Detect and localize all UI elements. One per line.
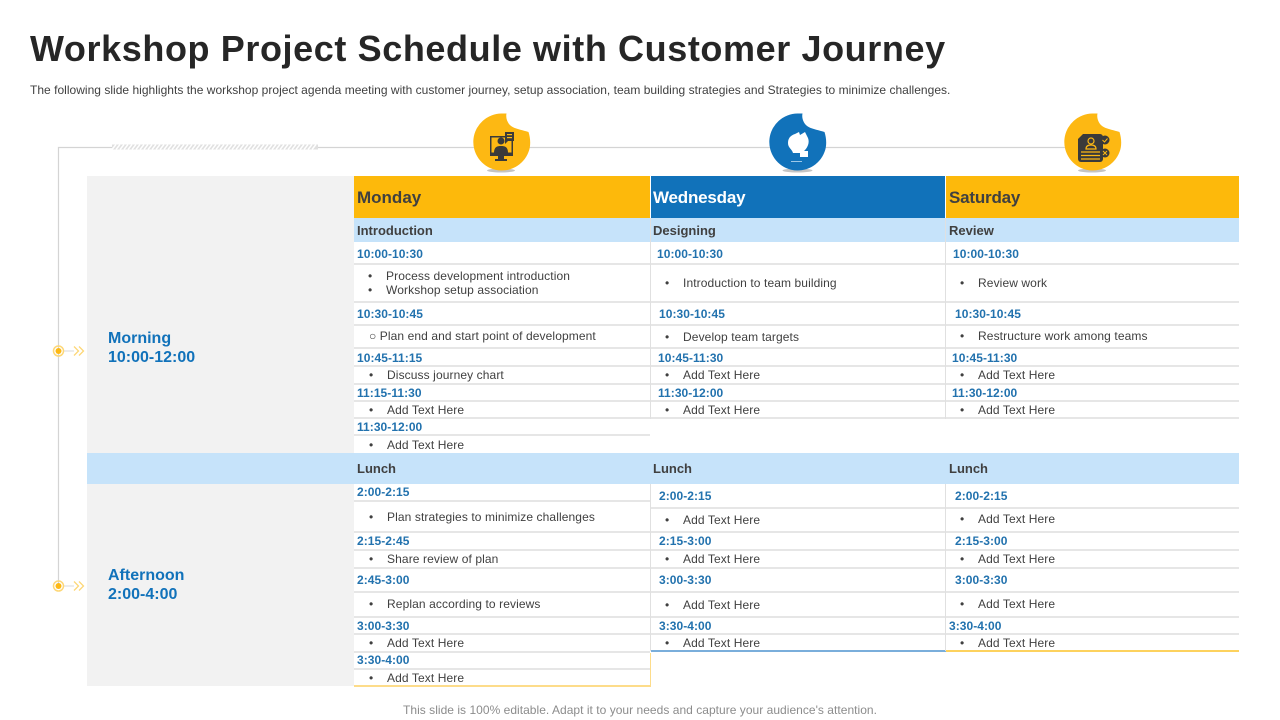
column: Saturday: 10:30-10:45 — [955, 307, 1021, 321]
column: Saturday: • Add Text Here — [960, 512, 1055, 526]
column: Wednesday: 2:15-3:00 — [659, 534, 711, 548]
icon: Saturday review document sticker — [1064, 114, 1122, 172]
column: Monday: • Add Text Here — [369, 438, 464, 452]
column: Monday: 11:30-12:00 — [357, 420, 422, 434]
column: Saturday: • Add Text Here — [960, 368, 1055, 382]
column: Saturday: • Add Text Here — [960, 636, 1055, 650]
column: Wednesday: • Add Text Here — [665, 403, 760, 417]
column: Monday: 2:15-2:45 — [357, 534, 409, 548]
column: Wednesday: • Introduction to team building — [665, 276, 837, 290]
column: Monday: 2:45-3:00 — [357, 573, 409, 587]
column: Saturday: 2:15-3:00 — [955, 534, 1007, 548]
icon: Monday online meeting sticker — [473, 114, 530, 172]
column: Monday: Introduction — [357, 223, 433, 238]
column: Monday: 11:15-11:30 — [357, 386, 422, 400]
column: Monday: • Plan strategies to minimize challenges — [369, 510, 595, 524]
column: Saturday: 3:00-3:30 — [955, 573, 1007, 587]
column: Wednesday: • Add Text Here — [665, 513, 760, 527]
label: morning: 10:00-12:00 — [108, 349, 195, 366]
column: Wednesday: 10:00-10:30 — [657, 247, 723, 261]
column: Saturday: • Review work — [960, 276, 1047, 290]
title: Workshop Project Schedule with Customer Journey — [30, 28, 946, 69]
activity header band — [354, 218, 1239, 242]
column: Saturday: • Add Text Here — [960, 403, 1055, 417]
column: Wednesday: 10:45-11:30 — [658, 351, 723, 365]
column: Wednesday: • Develop team targets — [665, 330, 799, 344]
column: Wednesday: 2:00-2:15 — [659, 489, 711, 503]
column divider: Monday / Wednesday — [650, 218, 651, 419]
panel: morning — [87, 176, 354, 453]
column: Saturday: 3:30-4:00 — [949, 619, 1001, 633]
column: Monday: • Add Text Here — [369, 671, 464, 685]
column: Monday: • Discuss journey chart — [369, 368, 504, 382]
panel: afternoon — [87, 484, 354, 686]
column: Saturday: • Add Text Here — [960, 597, 1055, 611]
column: Wednesday: • Add Text Here — [665, 368, 760, 382]
column: Monday: • Process development introduction — [368, 269, 570, 283]
heading: Wednesday — [651, 176, 945, 218]
column: Wednesday: 3:30-4:00 — [659, 619, 711, 633]
column: Wednesday — [651, 223, 946, 652]
column: Wednesday: 3:00-3:30 — [659, 573, 711, 587]
column: Saturday: Lunch — [949, 461, 988, 476]
heading: Saturday: Saturday — [949, 188, 1020, 207]
label: morning: Morning — [108, 330, 171, 347]
lunch band — [87, 453, 1239, 484]
label: afternoon: 2:00-4:00 — [108, 586, 177, 603]
label: afternoon — [108, 567, 184, 603]
column: Monday: • Add Text Here — [369, 636, 464, 650]
column: Saturday: Review — [949, 223, 994, 238]
column: Monday: 10:45-11:15 — [357, 351, 422, 365]
column: Saturday: 10:45-11:30 — [952, 351, 1017, 365]
column divider: lower Wednesday / Saturday — [945, 484, 946, 651]
column: Saturday: • Restructure work among teams — [960, 329, 1148, 343]
column: Monday: • Replan according to reviews — [369, 597, 540, 611]
heading: Monday — [354, 176, 650, 218]
icon: Wednesday idea sticker — [769, 114, 826, 172]
column: Saturday: 2:00-2:15 — [955, 489, 1007, 503]
column: Wednesday: • Add Text Here — [665, 552, 760, 566]
column: Monday: Lunch — [357, 461, 396, 476]
column: Monday: 3:00-3:30 — [357, 619, 409, 633]
column: Monday — [354, 223, 651, 687]
column: Saturday: • Add Text Here — [960, 552, 1055, 566]
column: Monday: 10:30-10:45 — [357, 307, 423, 321]
column: Saturday: 11:30-12:00 — [952, 386, 1017, 400]
marker: morning — [52, 345, 84, 357]
column: Monday: • Add Text Here — [369, 403, 464, 417]
column divider: Wednesday / Saturday — [945, 218, 946, 419]
subtitle: The following slide highlights the workshop project agenda meeting with customer journey, setup association, team building strategies and Strategies to minimize challenges. — [30, 83, 950, 97]
column: Wednesday: 11:30-12:00 — [658, 386, 723, 400]
column divider: lower Monday / Wednesday — [650, 484, 651, 651]
column: Monday: 3:30-4:00 — [357, 653, 409, 667]
column: Wednesday: Lunch — [653, 461, 692, 476]
column: Monday: • Workshop setup association — [368, 283, 538, 297]
heading: Monday: Monday — [357, 188, 421, 207]
heading: Wednesday: Wednesday — [653, 188, 745, 207]
footer note: This slide is 100% editable. Adapt it to your needs and capture your audience's attention. — [403, 703, 877, 717]
label: morning — [108, 330, 195, 366]
column: Wednesday: • Add Text Here — [665, 598, 760, 612]
column: Monday: • Share review of plan — [369, 552, 498, 566]
column: Monday: 10:00-10:30 — [357, 247, 423, 261]
column: Wednesday: Designing — [653, 223, 716, 238]
column: Monday: 2:00-2:15 — [357, 485, 409, 499]
label: afternoon: Afternoon — [108, 567, 184, 584]
marker: afternoon — [52, 580, 84, 592]
column: Monday: ○ Plan end and start point of development — [369, 329, 596, 343]
column: Saturday: 10:00-10:30 — [953, 247, 1019, 261]
column: Wednesday: • Add Text Here — [665, 636, 760, 650]
column: Wednesday: 10:30-10:45 — [659, 307, 725, 321]
column: Saturday — [946, 223, 1239, 652]
heading: Saturday — [946, 176, 1239, 218]
